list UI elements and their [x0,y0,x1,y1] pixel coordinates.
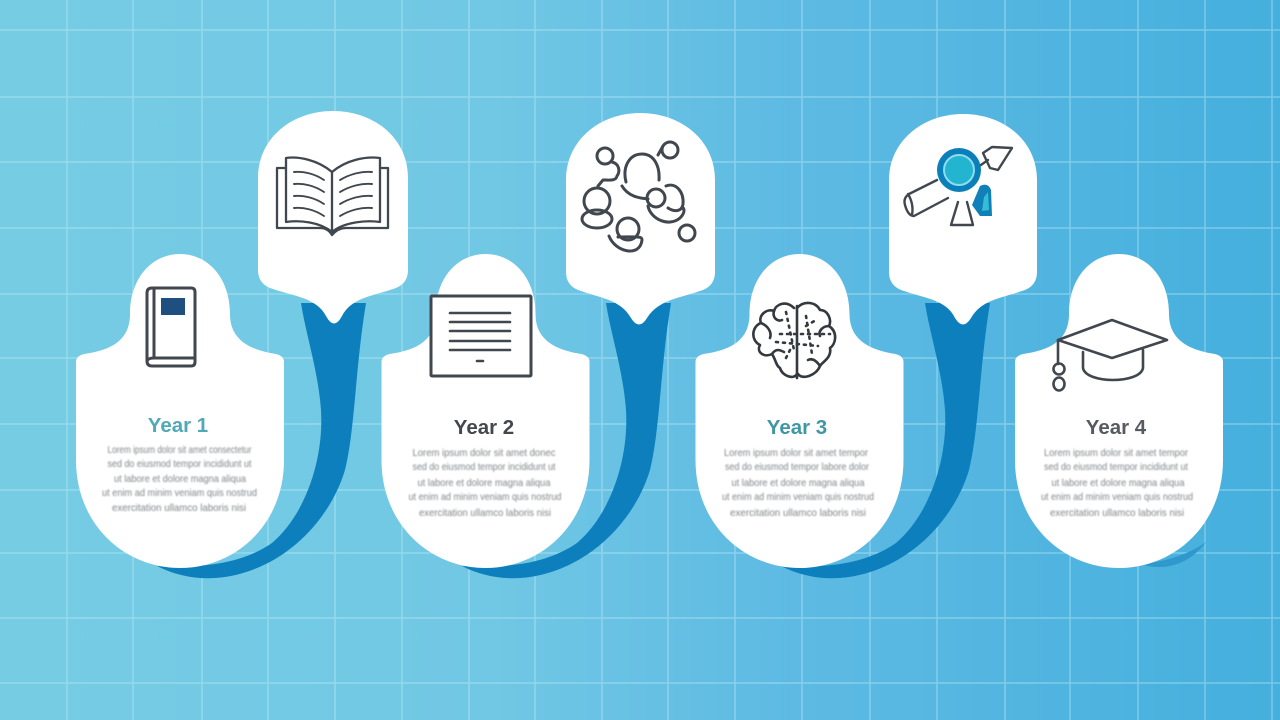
text block: year 4: ut enim ad minim veniam quis nostrud [1041,491,1193,503]
text block: year 4 [1041,447,1193,519]
text block: year 1: exercitation ullamco laboris nisi [112,502,246,514]
panel: year 3 [696,254,904,568]
panel: year 4 [1015,254,1223,568]
panel: top bubble book [258,111,408,324]
text block: year 3: ut enim ad minim veniam quis nostrud [722,491,874,503]
text block: year 1 [102,444,257,514]
text block: year 3: sed do eiusmod tempor labore dolor [725,461,869,473]
panel: year 1 [76,254,284,568]
text block: year 2 [408,447,562,519]
card shape [1015,254,1223,568]
icon: graduation cap [1054,320,1167,390]
text block: year 2: Lorem ipsum dolor sit amet donec [412,447,556,459]
card shadow: year 4 [1140,542,1206,567]
text block: year 3: ut labore et dolore magna aliqua [732,477,865,489]
ribbon: year 1 connector [157,303,366,578]
heading: year 4: Year 4 [1086,416,1147,439]
icon: document [431,296,531,376]
text block: year 2: sed do eiusmod tempor incididunt ut [412,461,556,473]
card shape [76,254,284,568]
text block: year 4: Lorem ipsum dolor sit amet tempor [1044,447,1188,459]
icon: people network [582,142,695,251]
bubble shape [889,114,1037,324]
icon: pencil and badge [904,147,1012,225]
heading: year 1: Year 1 [148,414,208,437]
text block: year 2: ut labore et dolore magna aliqua [418,477,551,489]
icon: open book [277,158,388,235]
text block: year 1: ut enim ad minim veniam quis nostrud [102,487,257,499]
text block: year 1: sed do eiusmod tempor incididunt ut [108,458,252,470]
text block: year 2: ut enim ad minim veniam quis nostrud [408,491,562,503]
card shape [696,254,904,568]
text block: year 1: Lorem ipsum dolor sit amet consectetur [108,444,252,456]
bubble shape [258,111,408,324]
panel: top bubble award [889,114,1037,324]
text block: year 3: exercitation ullamco laboris nisi [730,507,866,519]
text block: year 3 [722,447,874,519]
text block: year 4: ut labore et dolore magna aliqua [1052,477,1185,489]
text block: year 1: ut labore et dolore magna aliqua [114,473,246,485]
text block: year 4: exercitation ullamco laboris nisi [1050,507,1184,519]
ribbon: year 3 connector [781,303,990,578]
ribbon: year 2 connector [462,303,671,578]
bubble shape [566,113,715,324]
panel: top bubble network [566,113,715,324]
text block: year 3: Lorem ipsum dolor sit amet tempor [724,447,868,459]
text block: year 2: exercitation ullamco laboris nisi [419,507,551,519]
icon: brain [753,303,835,378]
heading: year 2: Year 2 [454,416,514,439]
panel: year 2 [382,254,590,568]
icon: closed book [147,288,195,366]
card shape [382,254,590,568]
heading: year 3: Year 3 [767,416,827,439]
text block: year 4: sed do eiusmod tempor incididunt ut [1044,461,1188,473]
